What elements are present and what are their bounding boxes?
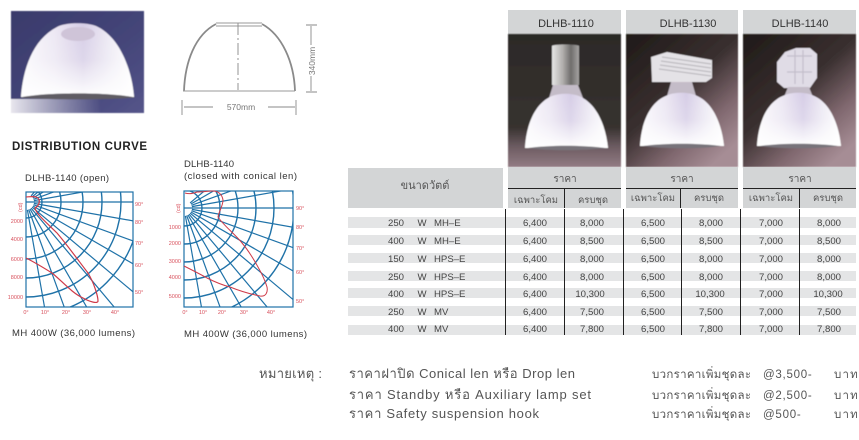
axis labels: 8000 — [11, 275, 23, 281]
row: 400 W MH-E: 7,000 — [759, 236, 783, 247]
note: standby lamp: ราคา Standby หรือ Auxiliary lamp set — [349, 387, 591, 402]
row: 250 W HPS-E: 250 — [388, 272, 404, 283]
notes — [259, 366, 858, 421]
price header: DLHB-1130: เฉพาะโคม — [631, 192, 675, 204]
dimension: width: 570mm — [227, 102, 255, 112]
chart caption: closed: MH 400W (36,000 lumens) — [184, 329, 307, 340]
photo: DLHB-1130 — [626, 34, 738, 167]
row: 400 W MV: W — [417, 324, 427, 335]
row: 400 W MH-E: 400 — [388, 236, 404, 247]
price header: DLHB-1130: ครบชุด — [694, 193, 724, 204]
row: 250 W MV: 250 — [388, 307, 404, 318]
row: 400 W MH-E: 6,500 — [641, 236, 665, 247]
axis labels: (cd) — [18, 202, 24, 212]
row: 250 W HPS-E: 7,000 — [759, 272, 783, 283]
row: 400 W MV: 400 — [388, 324, 404, 335]
note: safety hook: บาท — [834, 409, 858, 421]
axis labels: 2000 — [11, 219, 23, 225]
row: 250 W HPS-E: 6,500 — [641, 272, 665, 283]
heading: distribution curve: DISTRIBUTION CURVE — [12, 141, 147, 153]
row: 150 W HPS-E: 6,400 — [523, 254, 547, 265]
column: DLHB-1110 header — [508, 10, 621, 34]
row: 250 W MV — [388, 307, 841, 318]
note: conical lens: บาท — [834, 369, 858, 381]
axis labels: 6000 — [11, 257, 23, 263]
row: 400 W HPS-E: HPS–E — [434, 289, 465, 300]
column: DLHB-1130 header: DLHB-1130 — [660, 18, 716, 30]
chart label: closed — [184, 159, 297, 182]
price header: DLHB-1140: เฉพาะโคม — [749, 192, 793, 204]
axis labels: 4000 — [169, 275, 181, 281]
axis labels: 50° — [135, 290, 143, 296]
axis labels: 2000 — [169, 241, 181, 247]
row: 400 W MV: 7,800 — [817, 324, 841, 335]
note: safety hook — [349, 406, 858, 421]
notes label: หมายเหตุ : — [259, 366, 322, 382]
chart: open distribution curve — [8, 191, 143, 314]
axis labels: 30° — [83, 310, 91, 316]
row: 400 W MH-E: W — [417, 236, 427, 247]
row: 400 W MH-E: 8,500 — [817, 236, 841, 247]
row: 400 W MH-E: 8,500 — [699, 236, 723, 247]
row: 250 W MH-E: 250 — [388, 218, 404, 229]
price table rows — [348, 209, 856, 335]
row: 150 W HPS-E: 150 — [388, 254, 404, 265]
header cell: wattage — [348, 168, 503, 208]
row: 400 W MV: 6,400 — [523, 324, 547, 335]
photo: DLHB-1140 — [743, 34, 856, 167]
column: DLHB-1140 header: DLHB-1140 — [772, 18, 828, 30]
note: standby lamp: @2,500- — [763, 390, 812, 402]
row: 250 W HPS-E: W — [417, 272, 427, 283]
row: 400 W HPS-E: 10,300 — [575, 289, 605, 300]
chart label: closed: DLHB-1140 — [184, 159, 234, 170]
row: 400 W MV: 7,800 — [580, 324, 604, 335]
note: conical lens: บวกราคาเพิ่มชุดละ — [652, 366, 751, 381]
axis labels: 10° — [199, 310, 207, 316]
column: DLHB-1130 header — [626, 10, 738, 34]
chart label: closed: (closed with conical len) — [184, 171, 297, 182]
row: 400 W HPS-E — [388, 289, 843, 300]
axis labels: 4000 — [11, 237, 23, 243]
row: 400 W MV: MV — [434, 324, 449, 335]
row: 250 W MH-E: 7,000 — [759, 218, 783, 229]
row: 400 W HPS-E: 6,400 — [523, 289, 547, 300]
note: standby lamp: บาท — [834, 390, 858, 402]
price header: DLHB-1110: ครบชุด — [578, 195, 608, 206]
photo: reflector dome — [11, 11, 144, 113]
row: 400 W MV: 7,000 — [759, 324, 783, 335]
note: safety hook: ราคา Safety suspension hook — [349, 406, 540, 421]
axis labels: 1000 — [169, 225, 181, 231]
axis labels: 60° — [135, 263, 143, 269]
axis labels — [169, 203, 304, 316]
axis labels: 3000 — [169, 259, 181, 265]
column: DLHB-1110 header: DLHB-1110 — [538, 18, 594, 30]
note: standby lamp — [349, 387, 858, 402]
header cell: wattage: ขนาดวัตต์ — [401, 179, 449, 192]
row: 250 W HPS-E: 6,400 — [523, 272, 547, 283]
row: 250 W MV: W — [417, 307, 427, 318]
row: 250 W MV: 6,400 — [523, 307, 547, 318]
price header: DLHB-1140: ครบชุด — [813, 193, 843, 204]
row: 150 W HPS-E: 8,000 — [817, 254, 841, 265]
row: 250 W MV: MV — [434, 307, 449, 318]
axis labels: 20° — [62, 310, 70, 316]
photo: DLHB-1110 — [508, 34, 621, 167]
row: 400 W MV — [388, 324, 841, 335]
axis labels: 80° — [296, 225, 304, 231]
note: conical lens: ราคาฝาปิด Conical len หรือ Drop len — [349, 366, 575, 381]
axis labels: 90° — [296, 206, 304, 212]
row: 250 W MH-E: 8,000 — [817, 218, 841, 229]
axis labels — [8, 202, 143, 316]
chart: closed distribution curve — [168, 190, 304, 314]
row: 400 W MV: 6,500 — [641, 324, 665, 335]
row: 150 W HPS-E: W — [417, 254, 427, 265]
axis labels: 70° — [296, 246, 304, 252]
row: 400 W HPS-E: 400 — [388, 289, 404, 300]
axis labels: 40° — [267, 310, 275, 316]
note: safety hook: บวกราคาเพิ่มชุดละ — [652, 406, 751, 421]
axis labels: 20° — [218, 310, 226, 316]
diagram: reflector dimensions — [182, 23, 317, 115]
note: safety hook: @500- — [763, 409, 801, 421]
row: 250 W MH-E: 8,000 — [699, 218, 723, 229]
row: 150 W HPS-E: 6,500 — [641, 254, 665, 265]
price header: DLHB-1140: ราคา — [788, 174, 812, 185]
row: 400 W MH-E: 8,500 — [580, 236, 604, 247]
row: 400 W MH-E: MH–E — [434, 236, 461, 247]
price header: DLHB-1140 — [743, 167, 856, 208]
axis labels: 0° — [23, 310, 29, 316]
red intensity curve — [184, 191, 267, 296]
row: 150 W HPS-E: 8,000 — [699, 254, 723, 265]
axis labels: 50° — [296, 299, 304, 305]
chart label: open: DLHB-1140 (open) — [25, 173, 109, 184]
price header: DLHB-1110 — [508, 167, 621, 208]
row: 150 W HPS-E: 7,000 — [759, 254, 783, 265]
axis labels: 0° — [182, 310, 188, 316]
row: 250 W HPS-E: 8,000 — [699, 272, 723, 283]
price header: DLHB-1110: เฉพาะโคม — [514, 194, 558, 206]
row: 400 W HPS-E: 10,300 — [813, 289, 843, 300]
row: 400 W MH-E — [388, 236, 841, 247]
axis labels: 30° — [240, 310, 248, 316]
note: standby lamp: บวกราคาเพิ่มชุดละ — [652, 387, 751, 402]
price header: DLHB-1130 — [626, 167, 738, 208]
row: 250 W MV: 6,500 — [641, 307, 665, 318]
axis labels: 5000 — [169, 294, 181, 300]
row: 400 W HPS-E: W — [417, 289, 427, 300]
axis labels: 10° — [41, 310, 49, 316]
row: 250 W MH-E: 6,500 — [641, 218, 665, 229]
row: 250 W MH-E: MH–E — [434, 218, 461, 229]
chart caption: open: MH 400W (36,000 lumens) — [12, 328, 135, 339]
axis labels: (cd) — [176, 203, 182, 213]
row: 400 W MV: 7,800 — [699, 324, 723, 335]
price header: DLHB-1110: ราคา — [553, 174, 577, 185]
note: conical lens: @3,500- — [763, 369, 812, 381]
row: 250 W MH-E: 8,000 — [580, 218, 604, 229]
row: 250 W MV: 7,500 — [580, 307, 604, 318]
axis labels: 90° — [135, 202, 143, 208]
axis labels: 80° — [135, 220, 143, 226]
row: 250 W HPS-E: HPS–E — [434, 272, 465, 283]
axis labels: 40° — [111, 310, 119, 316]
row: 250 W MH-E: 6,400 — [523, 218, 547, 229]
row: 250 W MH-E: W — [417, 218, 427, 229]
row: 250 W HPS-E: 8,000 — [817, 272, 841, 283]
red intensity curve — [26, 197, 98, 302]
row: 250 W MH-E — [388, 218, 841, 229]
row: 400 W MH-E: 6,400 — [523, 236, 547, 247]
row: 250 W HPS-E — [388, 272, 841, 283]
row: 250 W MV: 7,500 — [699, 307, 723, 318]
price header: DLHB-1130: ราคา — [670, 174, 694, 185]
row: 400 W HPS-E: 6,500 — [641, 289, 665, 300]
axis labels: 10000 — [8, 295, 23, 301]
row: 250 W HPS-E: 8,000 — [580, 272, 604, 283]
row: 150 W HPS-E — [388, 254, 841, 265]
axis labels: 70° — [135, 241, 143, 247]
row: 400 W HPS-E: 7,000 — [759, 289, 783, 300]
axis labels: 60° — [296, 270, 304, 276]
row: 250 W MV: 7,500 — [817, 307, 841, 318]
row: 150 W HPS-E: 8,000 — [580, 254, 604, 265]
dimension: height: 340mm — [307, 47, 317, 75]
column: DLHB-1140 header — [743, 10, 856, 34]
row: 400 W HPS-E: 10,300 — [695, 289, 725, 300]
row: 150 W HPS-E: HPS–E — [434, 254, 465, 265]
note: conical lens — [349, 366, 858, 381]
row: 250 W MV: 7,000 — [759, 307, 783, 318]
